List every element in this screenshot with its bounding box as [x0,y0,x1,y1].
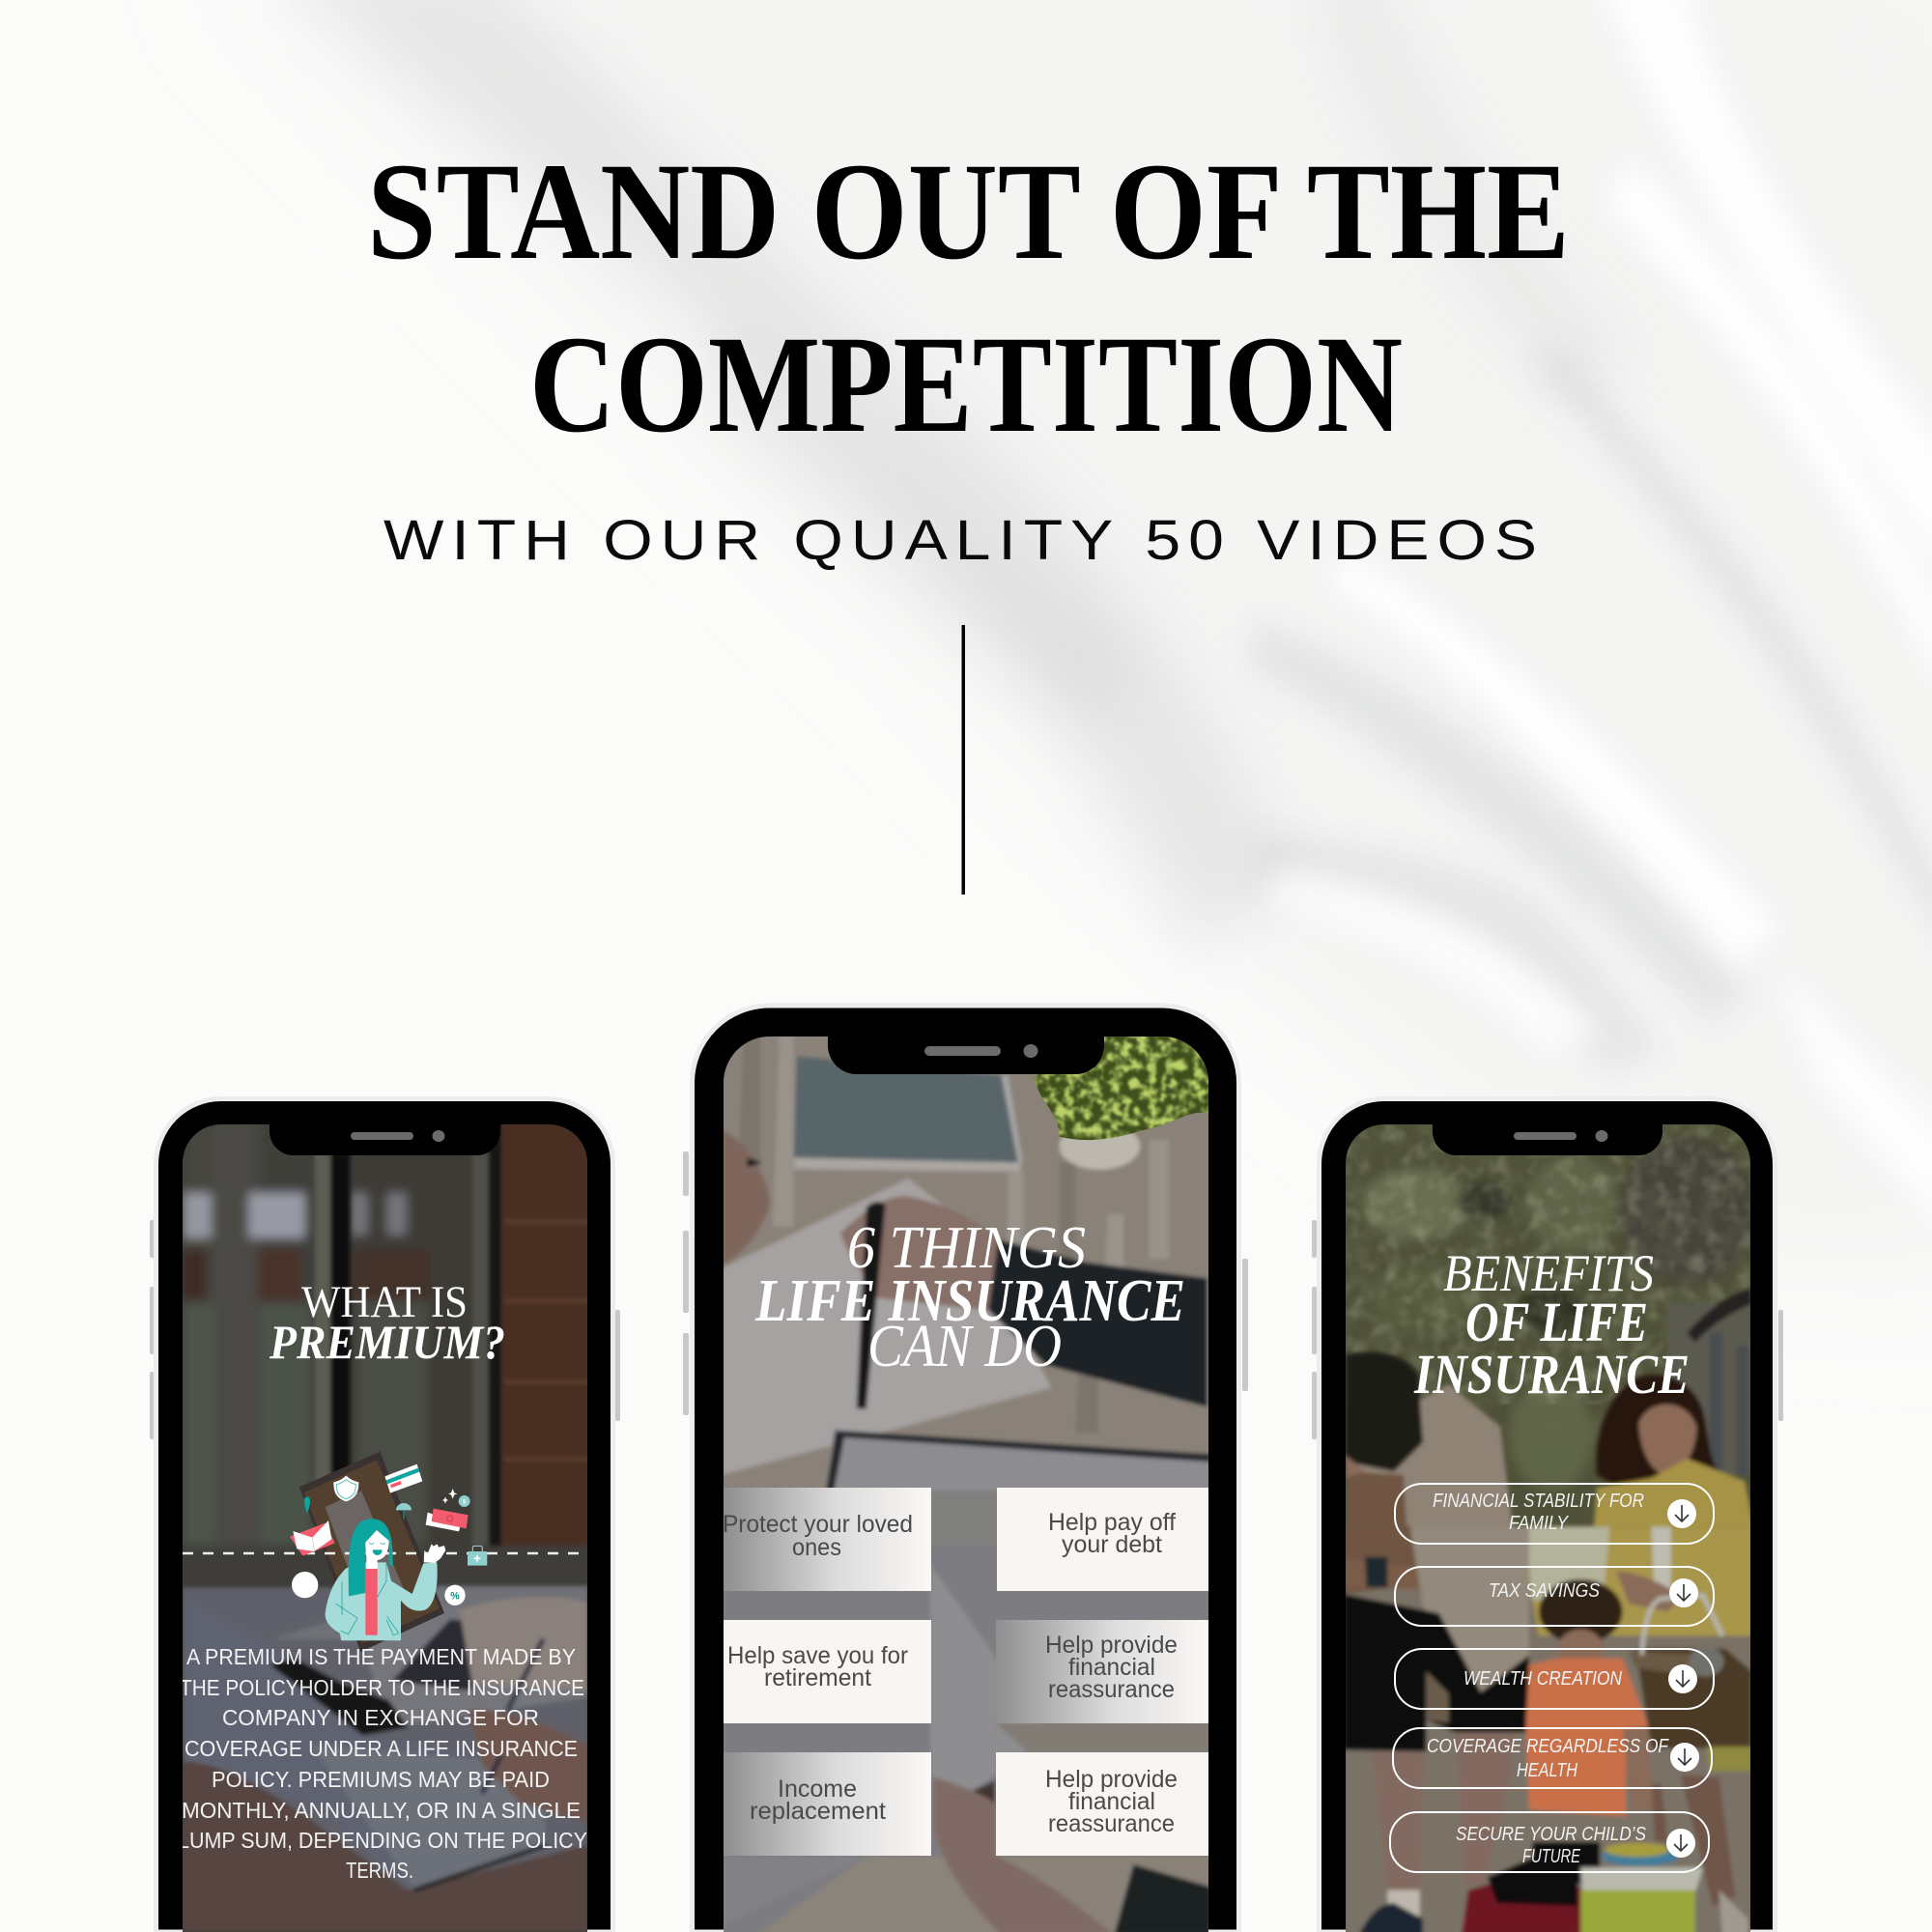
phone 2 camera [1024,1044,1037,1058]
pill: secure your child's future: SECURE YOUR CHILD’S [1456,1824,1647,1845]
pill: secure your child's future: FUTURE [1522,1846,1580,1867]
pill: tax savings: TAX SAVINGS [1489,1580,1601,1602]
tile: help provide financial reassurance [996,1620,1208,1723]
phone 3 side buttons [1312,1220,1783,1439]
phone 3 heading: INSURANCE [1413,1343,1690,1406]
icon: credit card [384,1464,422,1493]
dashed line [183,1552,587,1554]
illustration: woman with insurance icons [290,1464,487,1640]
phone 1: what is premium [150,1099,620,1932]
pill: financial stability: FAMILY [1509,1513,1569,1534]
pill: financial stability: FINANCIAL STABILITY FOR [1433,1491,1644,1512]
tile: help save you for retirement [724,1620,931,1723]
tile: income replacement [724,1752,931,1856]
tile: help pay off your debt: your debt [1062,1531,1162,1558]
phone 2 speaker [924,1046,1001,1056]
icon: first aid kit [468,1546,487,1566]
title: COMPETITION [529,308,1403,462]
phone 3 camera [1596,1130,1607,1142]
laptop lid behind illustration [299,1452,444,1652]
phone 3 heading: OF LIFE [1465,1291,1648,1353]
tile: help pay off your debt: Help pay off [1048,1509,1176,1536]
phone 1 speaker [351,1132,413,1140]
vertical divider line [962,625,965,895]
icon: sparkles and dollar coin: $ [463,1498,467,1505]
icon: umbrella [396,1503,412,1520]
plant foliage [1034,1037,1208,1140]
tile: income replacement: replacement [750,1798,886,1825]
phone 1 camera [433,1130,444,1142]
phone 3 speaker [1514,1132,1577,1140]
phone 1 heading: WHAT IS [301,1277,468,1327]
tile: help pay off your debt [997,1488,1208,1591]
tile: help provide financial reassurance: financial [1068,1654,1155,1681]
phone 3 notch [1433,1121,1662,1155]
phone 1 body text [178,1644,587,1883]
pill: coverage regardless of health [1393,1728,1712,1788]
pill: wealth creation: WEALTH CREATION [1463,1668,1622,1690]
phone 1 body text: THE POLICYHOLDER TO THE INSURANCE [180,1675,584,1700]
phone 3 screen photo [1344,1124,1754,1932]
icon: percent badge: % [450,1590,460,1602]
tile: protect your loved ones: ones [792,1534,841,1561]
tile: help provide financial reassurance 2 [996,1752,1208,1856]
icon: open book [290,1520,335,1556]
title: STAND OUT OF THE [367,135,1570,289]
tile: help save you for retirement: retirement [764,1664,871,1691]
phone 1 body text: TERMS. [346,1858,413,1883]
phone 1 heading [269,1277,505,1369]
icon: money notes [426,1509,469,1531]
phone 2 body [692,1006,1238,1932]
tile: help provide financial reassurance: reassurance [1048,1676,1175,1703]
title [367,135,1570,462]
pill: coverage regardless of health: COVERAGE REGARDLESS OF [1427,1736,1670,1757]
phone 3: benefits of life insurance [1312,1099,1783,1932]
tile: help provide financial reassurance 2: financial [1068,1788,1155,1815]
phone 3 heading: BENEFITS [1443,1244,1654,1302]
phone 1 body text: A PREMIUM IS THE PAYMENT MADE BY [186,1644,576,1669]
phone 2: six things life insurance can do [683,1006,1248,1932]
phone 3 body [1320,1099,1776,1932]
tile: protect your loved ones [723,1488,931,1591]
phone 2 heading: 6 THINGS [847,1215,1086,1281]
subtitle: WITH OUR QUALITY 50 VIDEOS [384,509,1545,572]
phone 1 screen photo [183,1121,588,1932]
phone 1 body text: COMPANY IN EXCHANGE FOR [222,1705,539,1730]
tile: help provide financial reassurance 2: reassurance [1048,1810,1175,1837]
tile: protect your loved ones: Protect your loved [723,1511,913,1538]
phone 1 heading: PREMIUM? [269,1315,505,1369]
phone 1 body [156,1099,612,1932]
pill: wealth creation [1395,1649,1714,1709]
pill: secure your child's future [1390,1812,1709,1872]
phone 2 side buttons [683,1151,1248,1415]
phone 1 body text: LUMP SUM, DEPENDING ON THE POLICY [178,1828,587,1853]
tile: help provide financial reassurance: Help provide [1045,1632,1178,1659]
woman figure [326,1519,445,1640]
pill: tax savings [1395,1567,1714,1626]
icon: white circle [292,1572,318,1598]
tile: help provide financial reassurance 2: Help provide [1045,1766,1178,1793]
phone 1 notch [270,1121,500,1155]
phone 2 notch [828,1032,1104,1074]
icon: shield [333,1476,358,1501]
phone 2 heading: CAN DO [867,1314,1062,1379]
phone 3 heading [1413,1244,1690,1406]
tile: help save you for retirement: Help save you for [727,1642,908,1669]
pill: coverage regardless of health: HEALTH [1517,1760,1577,1781]
phone 2 heading: LIFE INSURANCE [754,1268,1185,1334]
icon: percent badge [444,1585,466,1605]
pill: financial stability [1395,1484,1714,1544]
phone 2 screen photo [722,1031,1210,1932]
tile: income replacement: Income [778,1776,857,1803]
phone 1 body text: POLICY. PREMIUMS MAY BE PAID [212,1767,550,1792]
phone 1 body text: MONTHLY, ANNUALLY, OR IN A SINGLE [182,1798,581,1823]
phone 1 body text: COVERAGE UNDER A LIFE INSURANCE [185,1736,578,1761]
icon: sparkles and dollar coin [442,1489,470,1507]
phone 2 heading [754,1215,1185,1379]
icon: teal pin [304,1496,310,1514]
phone 1 side buttons [150,1220,620,1439]
